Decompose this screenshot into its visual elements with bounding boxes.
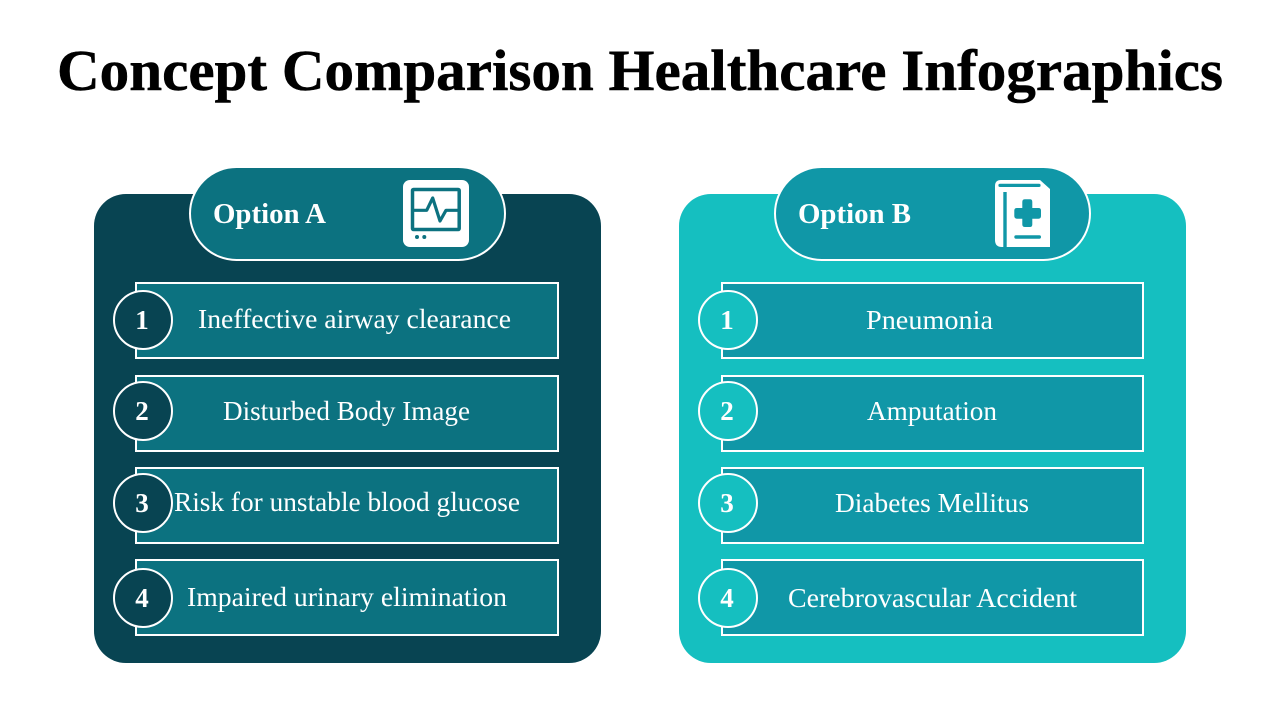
option B header pill [775, 167, 1090, 260]
title: Concept Comparison Healthcare Infographics [57, 38, 1223, 103]
row A3: 3 [135, 488, 149, 518]
icon: medical book [995, 180, 1050, 247]
row B3 [699, 468, 1143, 543]
row A1 [114, 283, 558, 358]
option A header pill [190, 167, 505, 260]
row B1: Pneumonia [866, 305, 993, 335]
row B2: Amputation [867, 396, 997, 426]
row A1: 1 [135, 305, 149, 335]
row B4: 4 [720, 583, 734, 613]
row A3 [114, 468, 558, 543]
row B3: Diabetes Mellitus [835, 488, 1029, 518]
row B4 [699, 560, 1143, 635]
row B4: Cerebrovascular Accident [788, 583, 1078, 613]
row A1: Ineffective airway clearance [198, 304, 511, 334]
icon: heart monitor [403, 180, 469, 247]
row A4: 4 [135, 583, 149, 613]
row A3: Risk for unstable blood glucose [174, 487, 520, 517]
row B1: 1 [720, 305, 734, 335]
panel: option A [94, 167, 601, 663]
row A4 [114, 560, 558, 635]
option A header pill: Option A [213, 199, 327, 230]
panel: option B [679, 167, 1186, 663]
row A2: 2 [135, 396, 149, 426]
row A2 [114, 376, 558, 451]
row B1 [699, 283, 1143, 358]
row A2: Disturbed Body Image [223, 396, 470, 426]
option B header pill: Option B [798, 199, 911, 230]
row B2: 2 [720, 396, 734, 426]
row B3: 3 [720, 488, 734, 518]
row A4: Impaired urinary elimination [187, 582, 508, 612]
row B2 [699, 376, 1143, 451]
